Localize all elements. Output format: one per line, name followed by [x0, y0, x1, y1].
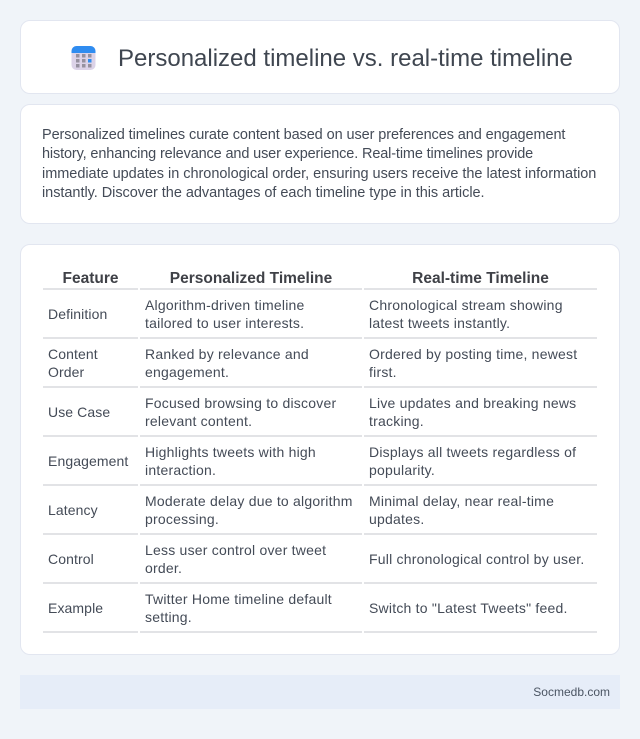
- row: content order: Ranked by relevance and: [145, 346, 309, 362]
- row: definition: [48, 297, 563, 331]
- intro paragraph: history, enhancing relevance and user experience. Real-time timelines provide: [42, 146, 533, 162]
- row: engagement: Highlights tweets with high: [145, 444, 316, 460]
- row: engagement: interaction.: [145, 462, 216, 478]
- row: example: Example: [48, 600, 103, 616]
- icon: calendar: [72, 46, 96, 70]
- row: latency: updates.: [369, 511, 424, 527]
- row: use case: Focused browsing to discover: [145, 395, 336, 411]
- title panel: [20, 20, 620, 94]
- intro paragraph: instantly. Discover the advantages of each timeline type in this article.: [42, 185, 485, 201]
- row: use case: tracking.: [369, 413, 424, 429]
- row: example: setting.: [145, 609, 192, 625]
- row: example: Switch to "Latest Tweets" feed.: [369, 600, 568, 616]
- row: content order: first.: [369, 364, 397, 380]
- row: latency: [48, 493, 554, 527]
- table header: [62, 270, 549, 287]
- table header: Personalized Timeline: [170, 270, 332, 287]
- row: definition: latest tweets instantly.: [369, 315, 510, 331]
- row: definition: Definition: [48, 306, 107, 322]
- footer credit: Socmedb.com: [533, 685, 610, 699]
- row: latency: Moderate delay due to algorithm: [145, 493, 353, 509]
- row: control: Control: [48, 551, 94, 567]
- panel: comparison table: [20, 244, 620, 655]
- row: latency: Latency: [48, 502, 98, 518]
- table header: Real-time Timeline: [412, 270, 549, 287]
- row: control: [48, 542, 584, 576]
- row: engagement: Engagement: [48, 453, 128, 469]
- intro paragraph: [42, 127, 596, 201]
- intro paragraph: immediate updates in chronological order, ensuring users receive the latest information: [42, 166, 596, 182]
- panel: intro text: [20, 104, 620, 224]
- row: latency: processing.: [145, 511, 219, 527]
- row: use case: Use Case: [48, 404, 110, 420]
- row: definition: Algorithm-driven timeline: [145, 297, 305, 313]
- row: content order: [48, 346, 578, 380]
- row: example: [48, 591, 568, 625]
- intro paragraph: Personalized timelines curate content based on user preferences and engagement: [42, 127, 565, 143]
- row: control: Full chronological control by user.: [369, 551, 584, 567]
- row: content order: Ordered by posting time, newest: [369, 346, 577, 362]
- row: use case: [48, 395, 576, 429]
- row: engagement: [48, 444, 576, 478]
- row: use case: relevant content.: [145, 413, 252, 429]
- row: content order: engagement.: [145, 364, 229, 380]
- row: control: order.: [145, 560, 182, 576]
- table header: Feature: [62, 270, 118, 287]
- row: engagement: Displays all tweets regardless of: [369, 444, 576, 460]
- footer bar: [20, 675, 620, 709]
- row: definition: tailored to user interests.: [145, 315, 304, 331]
- row: engagement: popularity.: [369, 462, 435, 478]
- row: latency: Minimal delay, near real-time: [369, 493, 554, 509]
- heading: Personalized timeline vs. real-time timeline: [118, 45, 573, 72]
- row: content order: Order: [48, 364, 84, 380]
- row: example: Twitter Home timeline default: [145, 591, 332, 607]
- row: content order: Content: [48, 346, 98, 362]
- row: definition: Chronological stream showing: [369, 297, 563, 313]
- row: control: Less user control over tweet: [145, 542, 326, 558]
- row: use case: Live updates and breaking news: [369, 395, 576, 411]
